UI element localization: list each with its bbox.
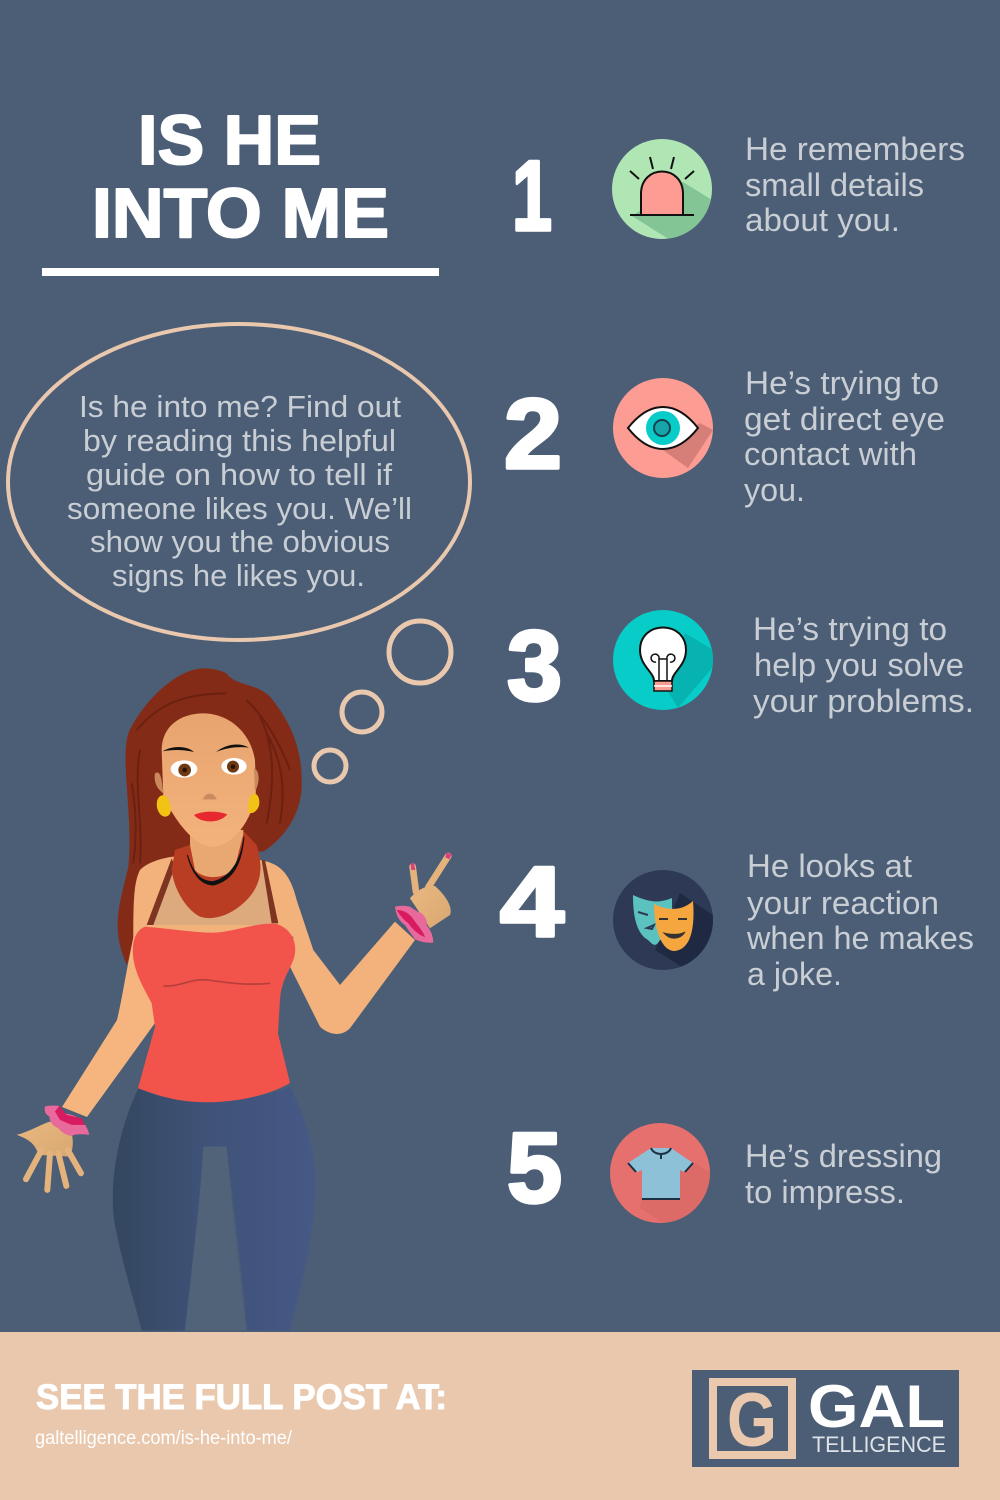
item 2 text: get direct eye <box>744 401 945 437</box>
footer band <box>0 1332 1000 1500</box>
logo: TELLIGENCE <box>812 1432 946 1457</box>
icon: eye <box>613 378 713 478</box>
item 4 text <box>746 848 974 992</box>
logo: G <box>727 1378 777 1463</box>
bubble text: someone likes you. We’ll <box>67 491 412 526</box>
right hand and scrunchie <box>395 853 452 943</box>
item 5 text: He’s dressing <box>745 1138 942 1174</box>
item 4 text: He looks at <box>747 848 912 884</box>
item 4 text: when he makes <box>746 920 974 956</box>
item 3 text: help you solve <box>754 647 964 683</box>
item 3 text <box>753 611 974 719</box>
icon: t-shirt <box>610 1123 710 1223</box>
logo <box>692 1370 959 1467</box>
red top <box>133 924 295 1102</box>
scarf <box>172 832 260 918</box>
logo: GAL <box>808 1373 945 1440</box>
bubble text: guide on how to tell if <box>86 457 392 492</box>
title: IS HE <box>138 101 321 179</box>
item 5 number: 5 <box>507 1112 562 1223</box>
item 3 text: your problems. <box>753 683 974 719</box>
item 4 number: 4 <box>500 846 564 957</box>
title <box>92 101 389 252</box>
item 1 text: about you. <box>745 202 900 238</box>
bubble text <box>67 389 412 593</box>
item 2 text: you. <box>744 472 805 508</box>
title underline <box>42 268 439 276</box>
item 2 text <box>744 365 945 508</box>
item 3 number: 3 <box>507 610 562 721</box>
footer call to action: SEE THE FULL POST AT: <box>36 1378 447 1417</box>
bubble text: Is he into me? Find out <box>79 389 401 424</box>
icon: theatre masks <box>613 870 713 972</box>
bubble text: show you the obvious <box>90 524 390 559</box>
item 5 text <box>745 1138 942 1210</box>
footer url: galtelligence.com/is-he-into-me/ <box>35 1428 293 1449</box>
thought bubble <box>8 324 470 782</box>
icon: light bulb <box>613 610 713 710</box>
item 4 text: your reaction <box>747 885 939 921</box>
jeans <box>113 1087 315 1331</box>
item 1 text <box>745 131 965 238</box>
item 1 number: 1 <box>512 140 552 251</box>
hair <box>118 668 302 965</box>
left hand and scrunchie <box>17 1106 89 1190</box>
item 2 number: 2 <box>504 378 562 489</box>
torso and right arm <box>133 857 415 1034</box>
bubble text: by reading this helpful <box>83 423 396 458</box>
item 3 text: He’s trying to <box>753 611 947 647</box>
title: INTO ME <box>92 174 389 252</box>
item 2 text: He’s trying to <box>745 365 939 401</box>
item 5 text: to impress. <box>745 1174 905 1210</box>
item 2 text: contact with <box>744 436 917 472</box>
item 1 text: He remembers <box>745 131 965 167</box>
bubble text: signs he likes you. <box>112 558 365 593</box>
face and neck <box>155 713 259 880</box>
icon: siren <box>612 139 712 250</box>
character: woman pointing <box>17 668 452 1331</box>
item 4 text: a joke. <box>747 956 842 992</box>
item 1 text: small details <box>745 167 924 203</box>
left arm <box>62 930 160 1117</box>
